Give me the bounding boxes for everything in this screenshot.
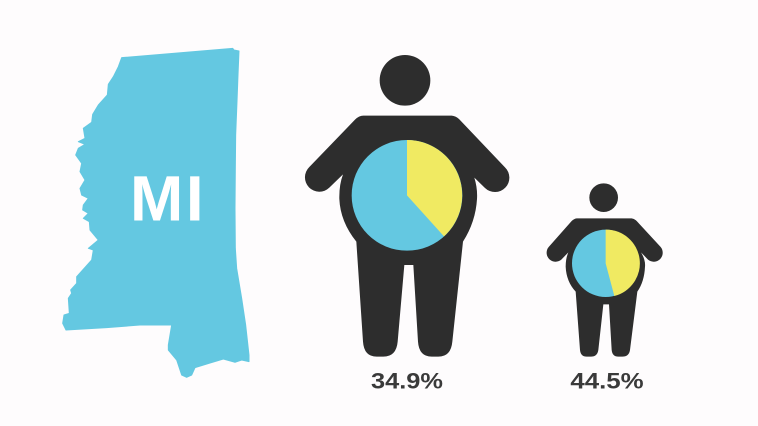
icon: head bbox=[589, 183, 618, 212]
figure: small person with pie bbox=[547, 183, 663, 393]
icon: body bbox=[547, 218, 663, 357]
state map: Mississippi bbox=[63, 48, 249, 377]
percentage label: 34.9% bbox=[371, 368, 443, 393]
icon: body bbox=[305, 116, 509, 357]
figure: large person with pie bbox=[305, 55, 509, 393]
pie: blue share bbox=[352, 140, 462, 251]
state label: MI bbox=[130, 163, 206, 235]
pie: yellow share bbox=[606, 230, 640, 296]
pie: blue share bbox=[572, 230, 639, 297]
icon: head bbox=[380, 55, 430, 106]
percentage label: 44.5% bbox=[570, 368, 644, 393]
pie: yellow share bbox=[407, 140, 462, 236]
